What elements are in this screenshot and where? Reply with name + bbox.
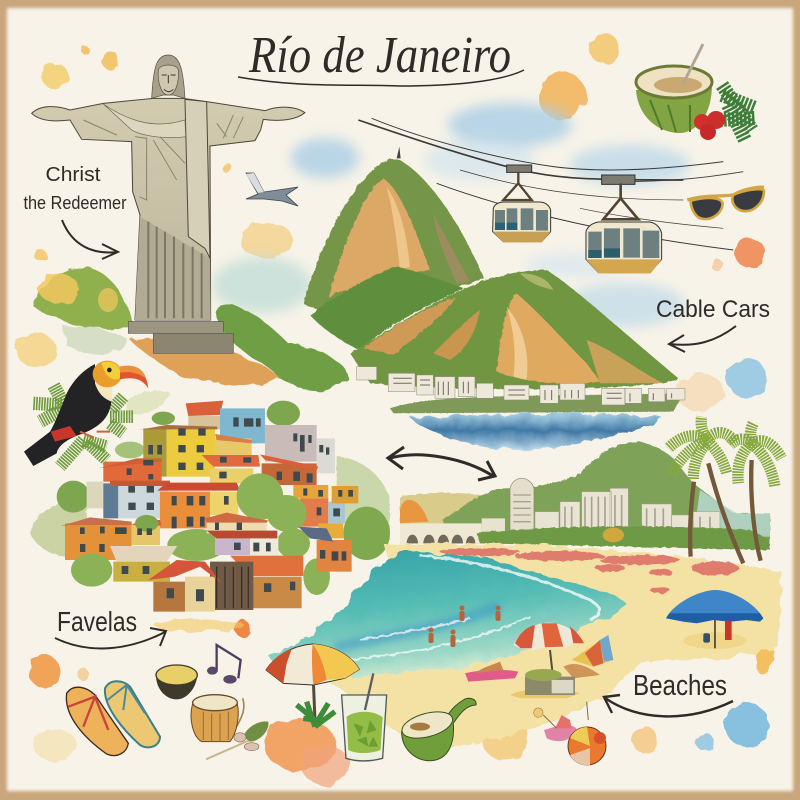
cable car left [493, 165, 551, 242]
icon: green coconut [399, 698, 476, 761]
swimmers [428, 606, 500, 647]
icon: caipirinha glass [342, 673, 387, 761]
favela shed planks [217, 567, 248, 608]
label: Beaches: Beaches [633, 670, 727, 702]
cable car lines [358, 118, 743, 250]
icon: drum [191, 695, 244, 742]
bottom objects [66, 644, 476, 761]
beach crowd [440, 548, 739, 593]
label: Favelas [55, 606, 166, 648]
icon: plane [246, 173, 298, 206]
icon: half coconut [156, 665, 197, 699]
favela buildings [61, 401, 358, 560]
Sugarloaf mountain [303, 147, 484, 350]
toucan [24, 361, 170, 467]
title: Río de Janeiro [248, 27, 511, 84]
icon: striped umbrella with plant [266, 644, 359, 727]
icon: coconut drink [636, 44, 755, 140]
label: Cable Cars: Cable Cars [656, 296, 770, 323]
icon: music notes [207, 645, 241, 684]
label: Beaches [604, 670, 733, 716]
town below mountains [357, 367, 685, 413]
icon: beach ball [568, 727, 606, 765]
sky wash [212, 103, 690, 327]
blue beach umbrella [666, 590, 763, 649]
foreground hill [350, 270, 678, 389]
label: Christ the Redeemer: Christ [46, 164, 101, 186]
icon: mallet and leaf [206, 721, 268, 759]
coastal city skyline [400, 442, 770, 550]
label: Cable Cars [656, 296, 770, 352]
beach toy group [534, 702, 588, 741]
palm trees [668, 417, 782, 563]
icon: sunglasses [687, 187, 764, 219]
favela trees [71, 473, 330, 595]
favela windows [80, 417, 353, 601]
double arrow [388, 447, 495, 480]
bay water [410, 414, 662, 450]
favela lower houses [110, 513, 352, 612]
icon: flip flops [66, 681, 160, 756]
cable car right [586, 175, 662, 273]
favelas [30, 401, 390, 612]
label: Christ the Redeemer [24, 164, 126, 259]
Christ the Redeemer statue [32, 55, 305, 353]
beach sand [325, 544, 782, 750]
label: Favelas: Favelas [57, 606, 137, 637]
red striped umbrella and sunbathers [465, 623, 613, 698]
sea foam and blue [335, 556, 599, 660]
sea [268, 552, 625, 682]
statue hill greenery [32, 268, 350, 389]
label: Christ the Redeemer: the Redeemer [24, 193, 126, 213]
